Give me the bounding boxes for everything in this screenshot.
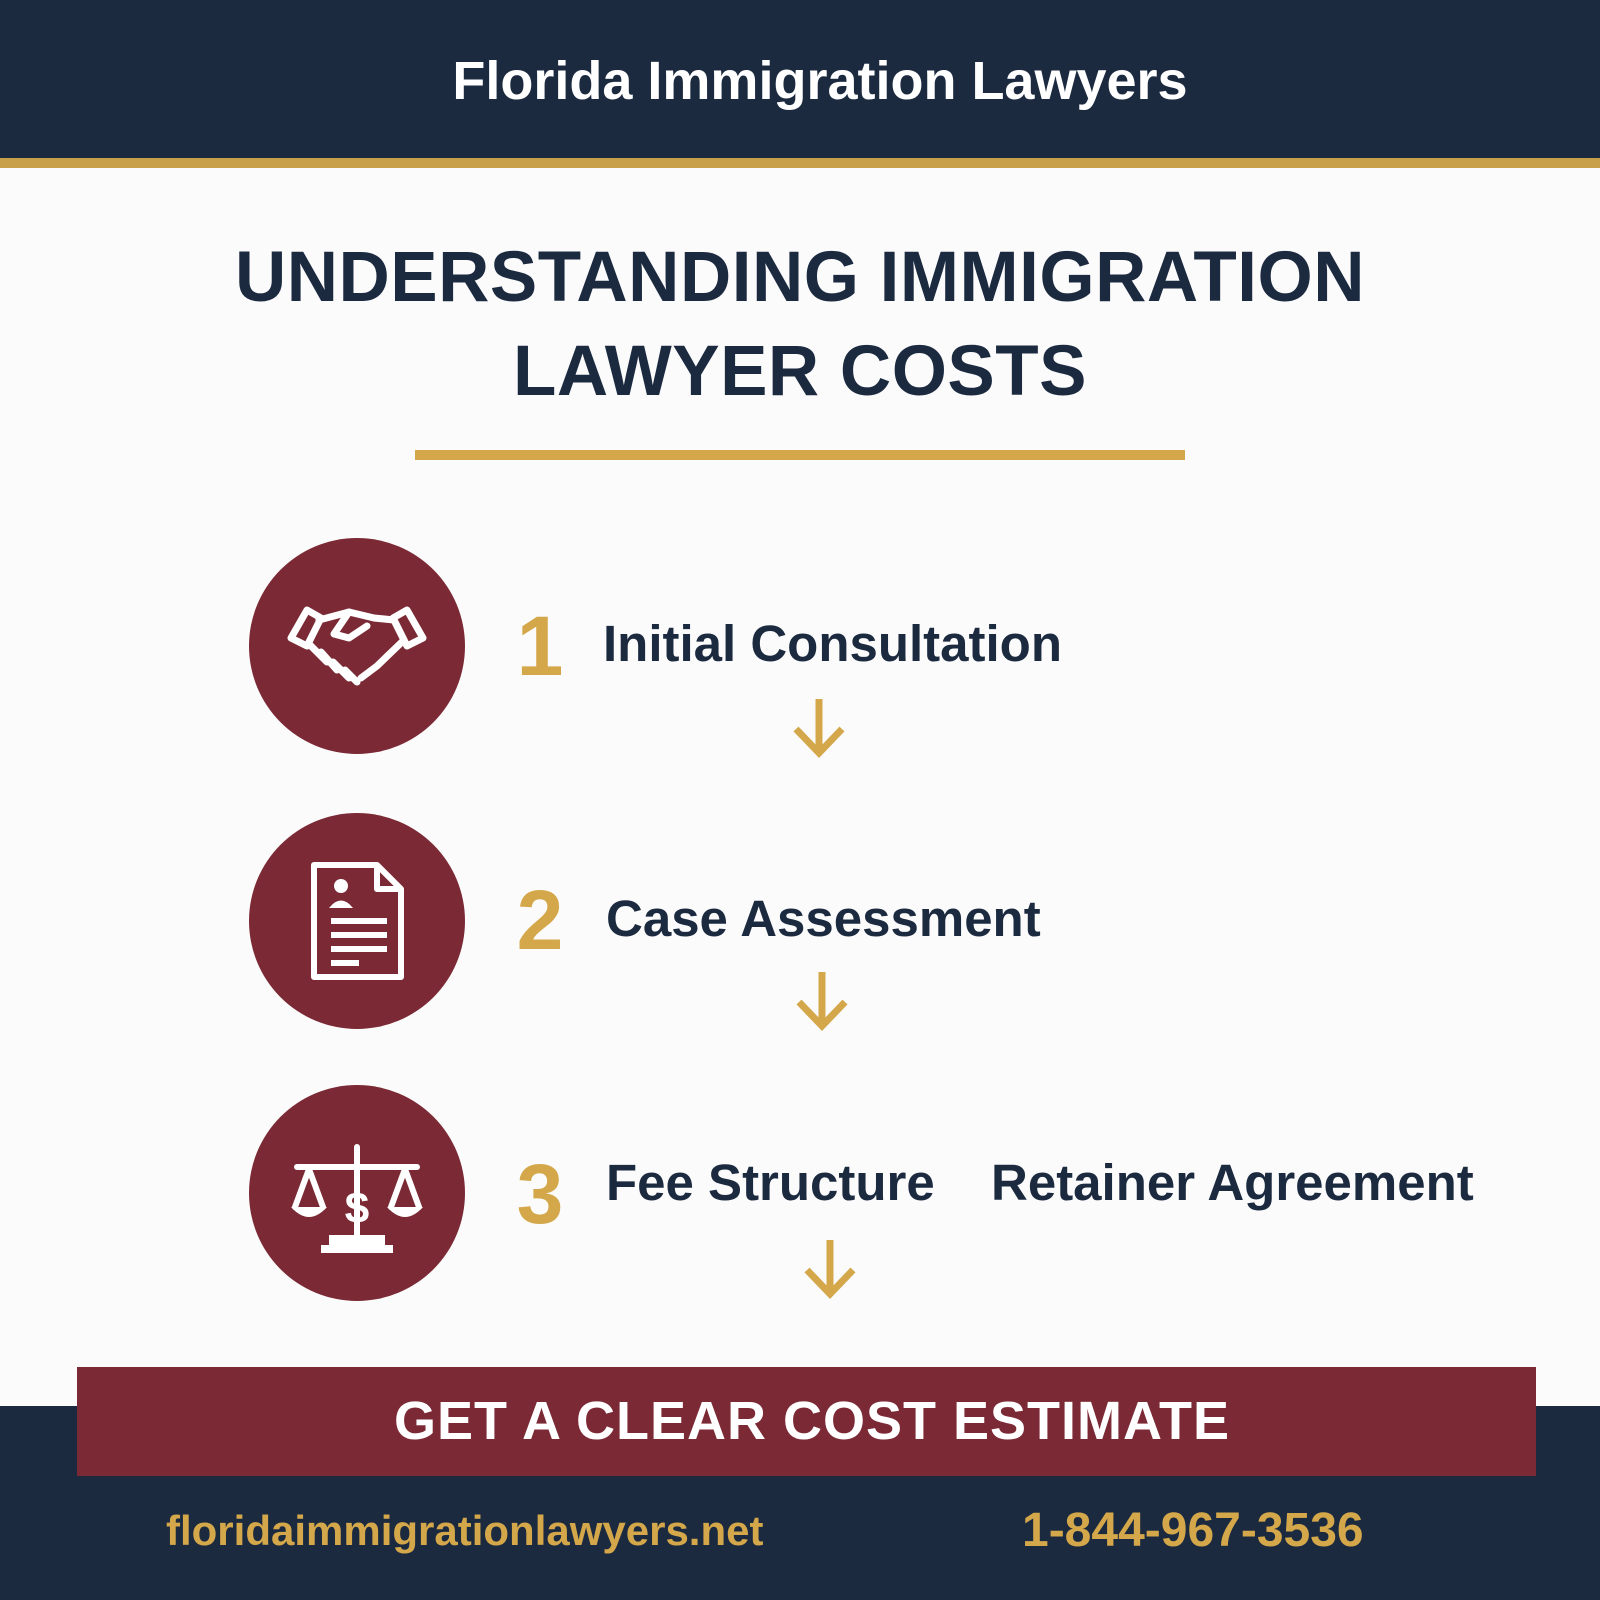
icon: scales with dollar [249, 1085, 465, 1301]
gold divider [415, 450, 1185, 460]
label: Initial Consultation: Initial Consultation [603, 615, 1062, 672]
icon: document [249, 813, 465, 1029]
gold header stripe [0, 158, 1600, 168]
step 1 [249, 538, 1062, 754]
header bar [0, 0, 1600, 158]
main title: LAWYER COSTS [513, 332, 1087, 411]
label: Case Assessment: Case Assessment [606, 890, 1041, 947]
number 2: 2 [517, 873, 563, 967]
arrow 2 [796, 972, 848, 1031]
arrow 3 [804, 1240, 856, 1299]
number 3: 3 [517, 1147, 563, 1241]
number 1: 1 [517, 599, 563, 693]
CTA banner [77, 1367, 1536, 1476]
footer bar [0, 1406, 1600, 1600]
label: Fee Structure: Fee Structure [606, 1154, 935, 1211]
CTA text: GET A CLEAR COST ESTIMATE [394, 1391, 1230, 1451]
step 3 [249, 1085, 1474, 1301]
main title [235, 238, 1365, 411]
footer url: floridaimmigrationlawyers.net [166, 1507, 763, 1554]
footer phone: 1-844-967-3536 [1022, 1504, 1364, 1557]
label: Retainer Agreement: Retainer Agreement [991, 1154, 1474, 1211]
icon: handshake [249, 538, 465, 754]
icon: scales with dollar: $ [345, 1184, 369, 1233]
header title: Florida Immigration Lawyers [452, 51, 1188, 111]
step 2 [249, 813, 1041, 1029]
arrow 1 [794, 699, 844, 758]
main title: UNDERSTANDING IMMIGRATION [235, 238, 1365, 317]
